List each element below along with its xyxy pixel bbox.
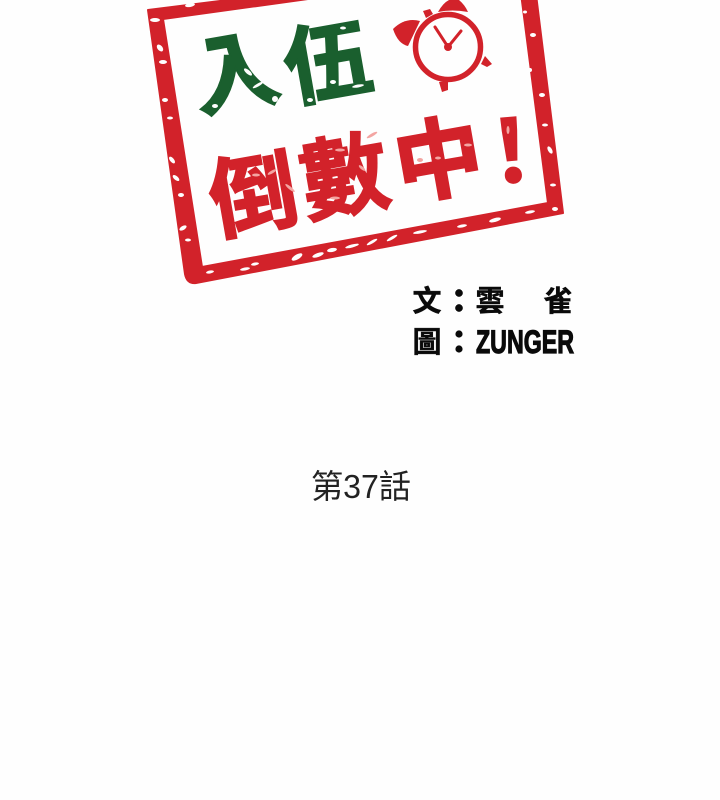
title: 入伍: 入: [185, 20, 287, 129]
title: 倒數中！: 中: [387, 105, 491, 217]
title: 倒數中！: ！: [464, 102, 558, 205]
title: 入伍: 伍: [277, 10, 379, 119]
stamp frame: [148, 0, 563, 283]
title: 倒數中！: [202, 102, 558, 252]
credit: artist: ZUNGER: [476, 324, 574, 360]
credit: artist: [412, 324, 574, 360]
credit: writer: 雲: [475, 286, 505, 318]
credit: writer: 雀: [543, 285, 573, 318]
credit: writer: 文: [412, 285, 442, 318]
title: 倒數中！: 倒: [202, 140, 306, 252]
credit: writer: [412, 285, 573, 318]
credit: artist: 圖: [412, 327, 442, 359]
stamp: red rubber-stamp frame with title: [148, 0, 563, 283]
title: 倒數中！: 數: [293, 122, 397, 234]
chapter label: 第37話: [311, 468, 411, 505]
title: 入伍: [185, 10, 379, 129]
icon: alarm clock: [393, 0, 492, 92]
